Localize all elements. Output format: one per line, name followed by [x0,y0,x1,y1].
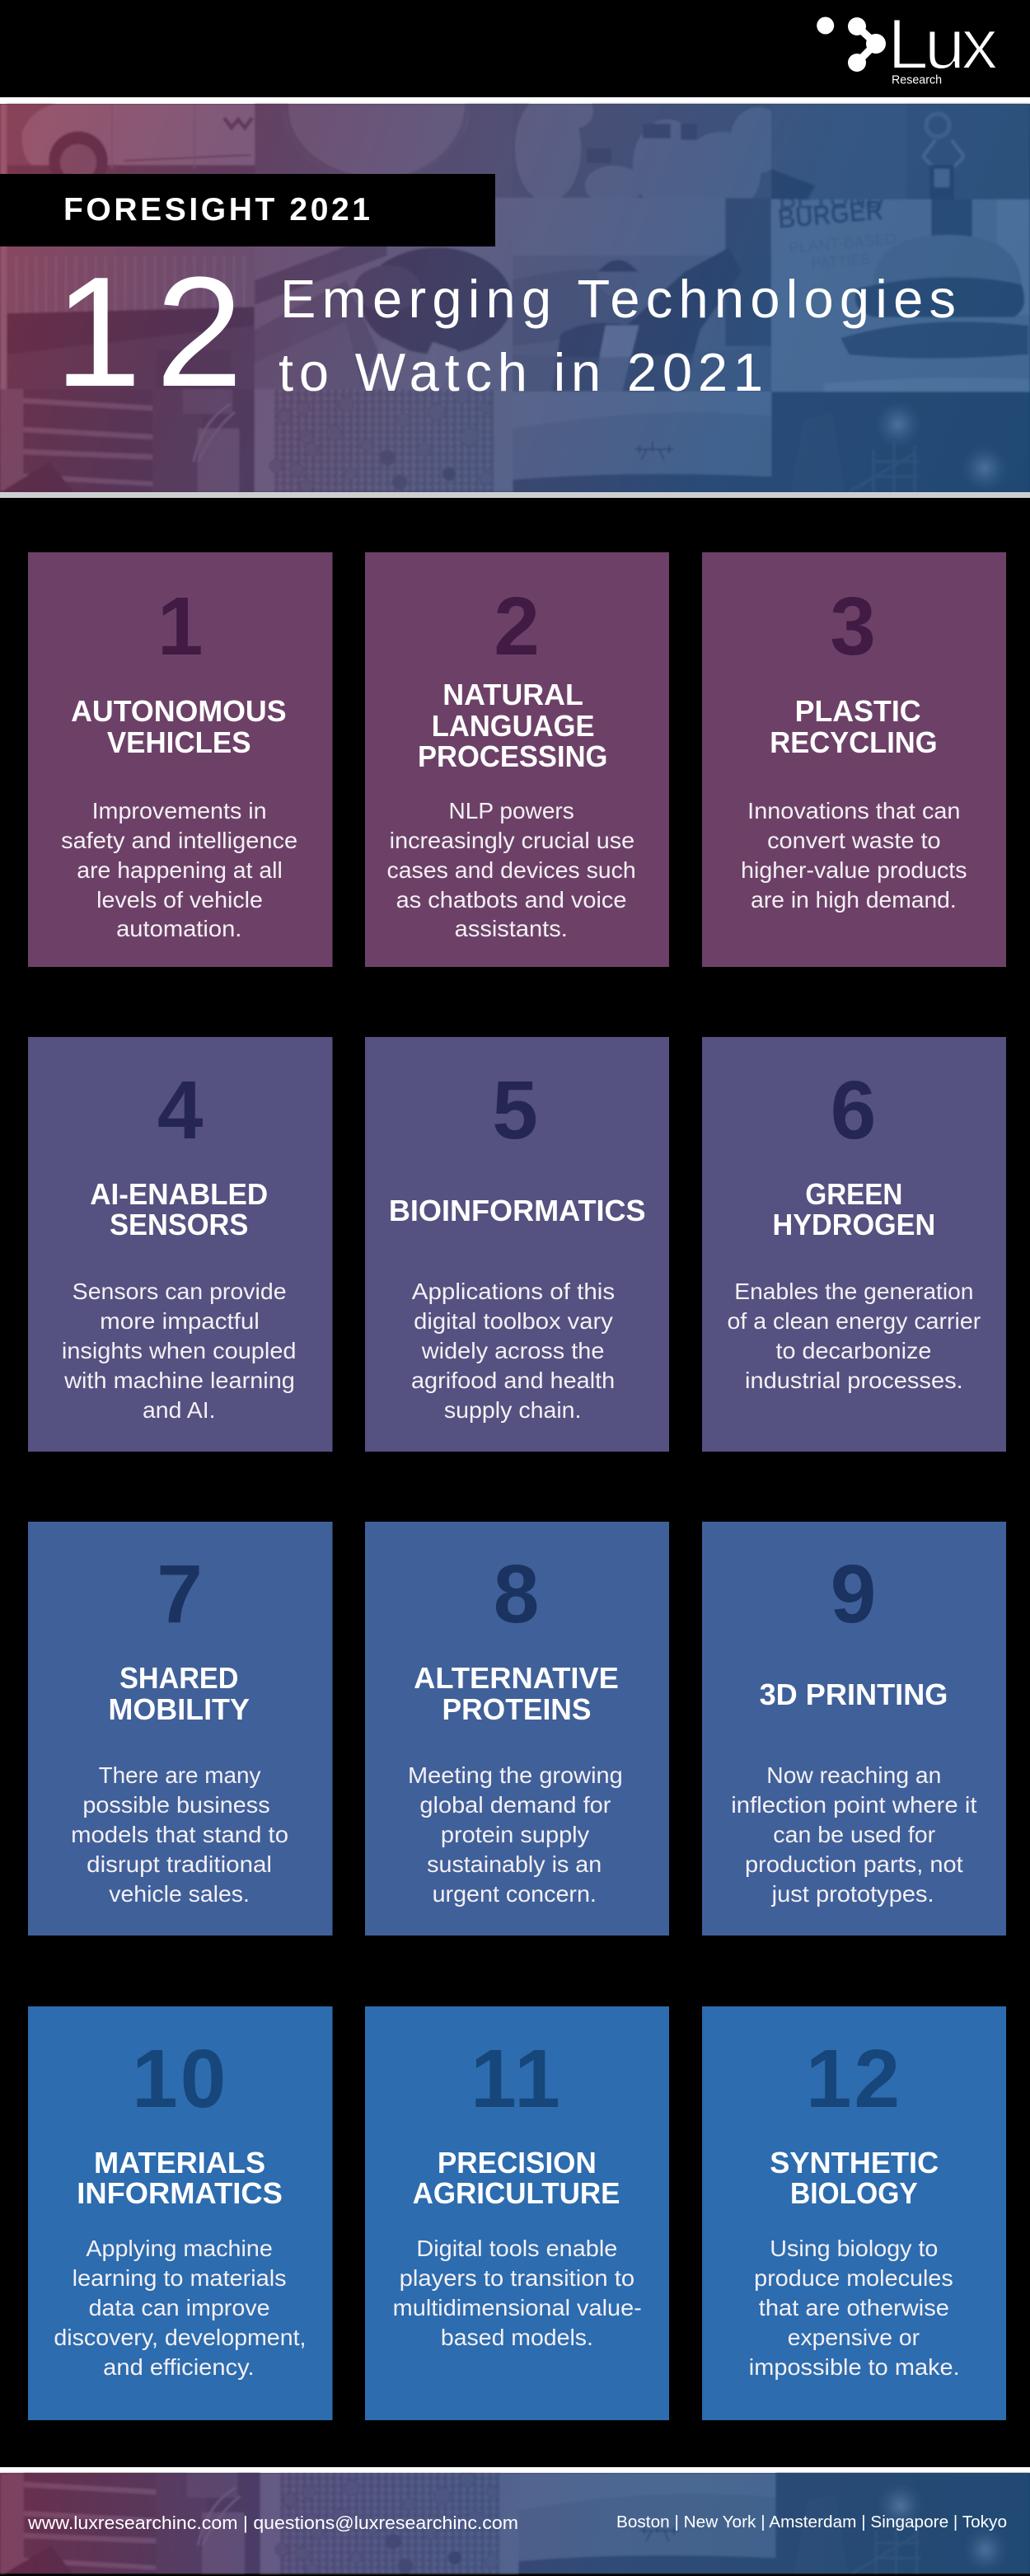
panel: hero photo mosaic [0,25,1030,493]
heading: GREEN [805,1177,902,1211]
description: industrial processes. [745,1368,963,1393]
description: Digital tools enable [416,2236,617,2261]
heading [770,2146,939,2210]
card background [702,1522,1006,1936]
photo: refinery at night [771,391,1030,492]
heading: SHARED [119,1661,238,1695]
card background [365,2006,669,2420]
divider band under hero [0,492,1030,498]
photo: plant-based burger sign: BURGER [776,195,884,235]
number: 8 [494,1548,539,1640]
description: vehicle sales. [109,1881,250,1907]
card background [28,1522,333,1936]
heading: BIOINFORMATICS [389,1194,646,1227]
photo: plastic bottles [511,102,773,199]
number: 10 [132,2033,228,2125]
footer office locations: Boston | New York | Amsterdam | Singapore | Tokyo [616,2513,1007,2531]
description: widely across the [421,1338,604,1363]
description: inflection point where it [731,1792,977,1818]
card background [365,1522,669,1936]
card background [702,1037,1006,1452]
heading: ALTERNATIVE [414,1661,619,1695]
photo: plant-based burger sign: BEYOND [779,184,884,215]
card background [702,2006,1006,2420]
heading: BIOLOGY [790,2176,918,2210]
footer photo mosaic [0,2472,1030,2576]
description: just prototypes. [771,1881,934,1907]
description: data can improve [89,2295,270,2320]
card 1 [28,552,333,967]
card 9 [702,1522,1006,1936]
description: multidimensional value- [393,2295,642,2320]
number: 12 [806,2033,902,2125]
description: expensive or [788,2325,920,2350]
description: Applying machine [86,2236,273,2261]
heading [773,1177,935,1241]
divider band top [0,97,1030,104]
heading: NATURAL [442,678,583,711]
photo: white disc [254,102,513,198]
number: 11 [471,2033,563,2125]
heading: 3D PRINTING [760,1677,948,1711]
description: Improvements in [92,798,267,823]
logo wordmark: Lux [887,5,998,84]
heading: VEHICLES [107,725,250,759]
number: 2 [494,580,540,673]
heading: SENSORS [110,1208,248,1241]
description: produce molecules [754,2265,953,2291]
heading: INFORMATICS [77,2176,283,2210]
heading [413,2146,620,2210]
description: supply chain. [444,1397,582,1423]
description: automation. [116,916,241,941]
description: can be used for [773,1822,935,1847]
description: are in high demand. [751,887,957,913]
heading: MATERIALS [94,2146,265,2180]
card 5 [365,1037,669,1452]
photo: pipette tubes [0,246,255,390]
heading: PROTEINS [442,1692,592,1726]
description: models that stand to [71,1822,288,1847]
number: 4 [157,1064,204,1157]
logo subtitle: Research [892,73,942,87]
photo: robot gripper [770,102,1030,199]
description [741,798,967,913]
description: Enables the generation [734,1279,974,1304]
description [731,1762,977,1907]
description: There are many [99,1762,260,1788]
description: assistants. [455,916,568,941]
description: are happening at all [77,857,283,883]
heading: MOBILITY [109,1692,250,1726]
card background [28,2006,333,2420]
card 6 [702,1037,1006,1452]
card background [702,552,1006,967]
photo: plant-based burger sign: PATTIES [811,251,871,272]
heading [90,1177,268,1241]
description: protein supply [441,1822,589,1847]
heading: PRECISION [438,2146,597,2180]
bar background [0,174,495,246]
heading [71,694,287,759]
bar text: FORESIGHT 2021 [63,192,370,228]
photo: hydrogen fuel tank [254,197,513,390]
description: insights when coupled [62,1338,297,1363]
description: Innovations that can [747,798,961,823]
heading: PLASTIC [795,694,921,728]
description: NLP powers [448,798,574,823]
footer contact text: www.luxresearchinc.com | questions@luxresearchinc.com [27,2513,518,2533]
big number 12: 12 [54,245,243,420]
description [393,2236,642,2350]
heading: AUTONOMOUS [71,694,287,728]
divider band above footer [0,2467,1030,2473]
heading: HYDROGEN [773,1208,935,1241]
number: 6 [831,1064,876,1157]
icon: molecule mark [817,16,886,72]
description: convert waste to [767,828,941,853]
title line 1: Emerging Technologies [280,269,956,329]
description: higher-value products [741,857,967,883]
card background [28,1037,333,1452]
heading: PROCESSING [418,739,607,773]
number: 7 [157,1548,203,1640]
card background [365,552,669,967]
description: of a clean energy carrier [727,1308,981,1334]
footer gradient overlay [0,2473,1030,2574]
description: safety and intelligence [61,828,297,853]
photo: drone over field [512,391,773,492]
photo: autonomous car [0,102,255,247]
description: levels of vehicle [96,887,263,913]
number: 3 [830,580,876,673]
card 12 [702,2006,1006,2420]
title line 2: to Watch in 2021 [279,342,763,402]
photo: man with phone [512,197,771,392]
photo: molecules [254,388,513,492]
description [54,2236,307,2380]
description: Using biology to [770,2236,938,2261]
description: Meeting the growing [408,1762,623,1788]
description: global demand for [419,1792,611,1818]
description: to decarbonize [776,1338,931,1363]
photo: plant-based burger sign [770,184,1030,392]
description: urgent concern. [433,1881,597,1907]
description: more impactful [100,1308,260,1334]
footer panel [0,2472,1030,2576]
description [727,1279,981,1393]
description: cases and devices such [387,857,636,883]
description: and AI. [143,1397,216,1423]
description: Applications of this [412,1279,615,1304]
description: digital toolbox vary [414,1308,613,1334]
heading: RECYCLING [770,725,938,759]
title [54,245,956,420]
card 10 [28,2006,333,2420]
description [71,1762,288,1907]
card 11 [365,2006,669,2420]
photo layer [0,25,1030,493]
heading: AGRICULTURE [413,2176,620,2210]
card 8 [365,1522,669,1936]
description: sustainably is an [427,1851,602,1877]
description: Now reaching an [766,1762,941,1788]
description [62,1279,297,1423]
description: disrupt traditional [87,1851,272,1877]
description: that are otherwise [759,2295,949,2320]
description: production parts, not [745,1851,963,1877]
description [61,798,297,941]
photo: 3D printer rails [0,388,255,492]
card 7 [28,1522,333,1936]
heading [418,678,607,773]
gradient overlay [0,104,1030,492]
description: impossible to make. [749,2354,960,2380]
description: possible business [82,1792,270,1818]
number: 1 [157,580,204,673]
heading [770,694,938,759]
description: and efficiency. [103,2354,255,2380]
card 3 [702,552,1006,967]
logo: Lux Research [817,5,998,87]
description: players to transition to [400,2265,634,2291]
description: Sensors can provide [73,1279,287,1304]
description: agrifood and health [411,1368,615,1393]
card background [28,552,333,967]
header band [817,5,998,87]
heading: LANGUAGE [432,709,595,743]
heading: SYNTHETIC [770,2146,939,2180]
heading: AI-ENABLED [90,1177,268,1211]
description [411,1279,615,1423]
photo: plant-based burger sign: PLANT-BASED [789,231,897,257]
card 4 [28,1037,333,1452]
card 2 [365,552,669,967]
card background [365,1037,669,1452]
description [749,2236,960,2380]
description: based models. [441,2325,593,2350]
description: with machine learning [63,1368,295,1393]
description: learning to materials [73,2265,287,2291]
number: 5 [492,1064,538,1157]
heading [414,1661,619,1726]
description: as chatbots and voice [396,887,626,913]
label bar: Foresight 2021 [0,174,495,246]
number: 9 [831,1548,876,1640]
description [408,1762,623,1907]
heading [109,1661,250,1726]
description: discovery, development, [54,2325,307,2350]
description [387,798,636,941]
description: increasingly crucial use [390,828,634,853]
heading [77,2146,283,2210]
